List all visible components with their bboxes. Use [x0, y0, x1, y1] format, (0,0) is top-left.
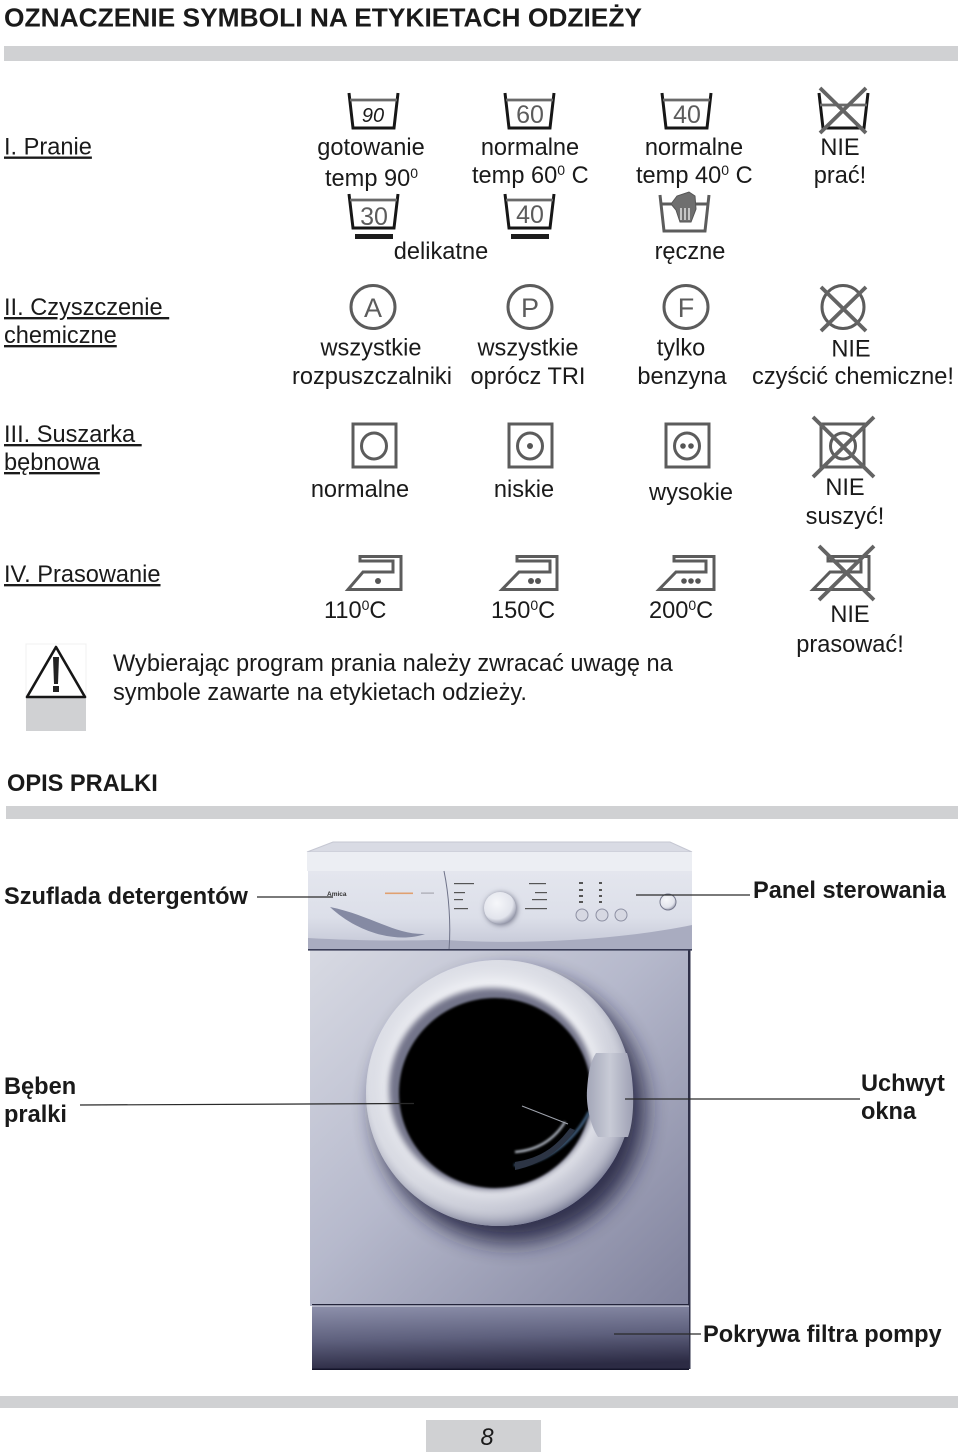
label: boiling: 0 [410, 165, 418, 181]
label: all except TRI: wszystkie [477, 336, 578, 362]
plinth [312, 1304, 689, 1370]
label: all except TRI: oprócz TRI [471, 364, 585, 390]
label: petrol only [637, 336, 727, 390]
label: 200: C [696, 598, 713, 624]
door ring [366, 960, 632, 1226]
section header bar [6, 806, 958, 819]
label: all solvents [292, 336, 452, 390]
label: no dry clean [752, 336, 954, 390]
icon: wash 40: 40 [673, 101, 701, 129]
icon: iron 150 [502, 556, 557, 590]
label: petrol only: tylko [657, 336, 705, 362]
icon: A: A [364, 293, 382, 323]
label: all except TRI [471, 336, 585, 390]
label: normal 40: 0 [721, 162, 729, 178]
label: delicate: delikatne [394, 239, 488, 265]
icon: wash 60 [505, 93, 554, 129]
icon: delicate 40 [505, 194, 554, 239]
label: normal 60 [472, 135, 589, 189]
callout: pump filter cover: Pokrywa filtra pompy [703, 1322, 942, 1348]
label: no ironing: prasować! [796, 632, 904, 658]
icon: F [664, 286, 708, 328]
label: 110: 0 [362, 597, 370, 613]
label: normal 60: 0 [557, 162, 565, 178]
callout: door handle: okna [861, 1099, 917, 1125]
label: low: niskie [494, 477, 554, 503]
label: normal 60: C [565, 163, 589, 189]
icon: iron 110 [348, 556, 401, 590]
heading: dry cleaning: chemiczne [4, 323, 117, 349]
section: dry cleaning [4, 286, 954, 390]
page number: 8 [480, 1425, 494, 1451]
label: boiling: gotowanie [317, 135, 425, 161]
heading: tumble dryer: III. Suszarka [4, 422, 142, 448]
power button [660, 894, 676, 910]
section header bar [4, 46, 958, 61]
heading: tumble dryer [4, 422, 142, 476]
icon: do not wash [819, 88, 868, 133]
buttons [576, 909, 627, 921]
label: no dry clean: NIE [831, 336, 871, 362]
label: 200: 200 [649, 598, 688, 624]
icon: P [508, 286, 552, 328]
icon: F: F [678, 293, 694, 323]
icon: dryer high [666, 424, 709, 467]
label: no dryer: NIE [825, 475, 865, 501]
label: all solvents: wszystkie [320, 336, 421, 362]
callout: control panel: Panel sterowania [753, 878, 947, 904]
label: boiling: temp 90 [325, 166, 410, 192]
door handle [587, 1053, 633, 1137]
label: 110: C [369, 598, 386, 624]
heading: ironing: IV. Prasowanie [4, 562, 161, 588]
label: normal 60: temp 60 [472, 163, 557, 189]
callout: detergent drawer: Szuflada detergentów [4, 884, 248, 910]
section: washing [4, 88, 868, 265]
label: all solvents: rozpuszczalniki [292, 364, 452, 390]
icon: dryer normal [353, 424, 396, 467]
callout: drum [4, 1074, 414, 1128]
note text [113, 651, 674, 706]
label: no ironing: NIE [830, 602, 870, 628]
icon: no ironing [813, 546, 874, 600]
label: boiling [317, 135, 425, 192]
label: 150: C [538, 598, 555, 624]
label: no dryer: suszyć! [806, 504, 884, 530]
callout: door handle: Uchwyt [861, 1071, 945, 1097]
note text: Wybierając program prania należy zwracać uwagę na [113, 651, 674, 677]
label: normal 40 [636, 135, 753, 189]
icon: P: P [521, 293, 539, 323]
callout: door handle [625, 1071, 945, 1125]
door window [389, 988, 595, 1190]
label: normal 40: C [729, 163, 753, 189]
icon: dryer low [509, 424, 552, 467]
icon: wash 40 [662, 93, 711, 129]
icon: wash 60: 60 [516, 101, 544, 129]
cabinet body [310, 948, 690, 1306]
label: petrol only: benzyna [637, 364, 727, 390]
program labels [454, 882, 602, 909]
heading: dry cleaning: II. Czyszczenie [4, 295, 169, 321]
brand: Amica [327, 891, 347, 898]
control panel [307, 842, 692, 951]
label: 150: 0 [530, 597, 538, 613]
icon: no dry clean [821, 286, 866, 331]
heading: I. Pranie: I. Pranie [4, 134, 92, 160]
program knob [485, 893, 517, 925]
icon: delicate 40: 40 [516, 201, 544, 229]
page number [426, 1420, 541, 1452]
heading: washing machine description: OPIS PRALKI [7, 771, 158, 797]
icon: wash 90: 90 [362, 105, 384, 127]
note text: symbole zawarte na etykietach odzieży. [113, 680, 527, 706]
section: tumble dryer [4, 417, 884, 530]
label: 150: 150 [491, 598, 530, 624]
door shadow [375, 973, 645, 1243]
label: normal 40: normalne [645, 135, 743, 161]
label: no dry clean: czyścić chemiczne! [752, 364, 954, 390]
label: 200: 0 [688, 597, 696, 613]
icon: warning triangle [26, 644, 86, 731]
callout: drum: Bęben [4, 1074, 76, 1100]
icon: delicate 30: 30 [360, 203, 388, 231]
icon: delicate 30 [349, 194, 398, 239]
label: 110: 110 [324, 598, 362, 624]
heading: tumble dryer: bębnowa [4, 450, 101, 476]
icon: hand wash [660, 192, 709, 231]
label: normal 40: temp 40 [636, 163, 721, 189]
icon: wash 90 [349, 93, 398, 128]
heading: dry cleaning [4, 295, 169, 349]
label: no ironing [796, 602, 904, 658]
label: no dryer [806, 475, 884, 530]
right edge shadow [688, 950, 690, 1369]
label: do not wash [814, 135, 866, 189]
section: ironing [4, 546, 904, 658]
label: do not wash: NIE [820, 135, 860, 161]
icon: iron 200 [659, 556, 714, 590]
title: OZNACZENIE SYMBOLI NA ETYKIETACH ODZIEŻY [4, 2, 642, 32]
label: high: wysokie [648, 480, 733, 506]
label: hand wash: ręczne [655, 239, 725, 265]
label: do not wash: prać! [814, 163, 866, 189]
label: normal: normalne [311, 477, 409, 503]
icon: A [351, 286, 395, 328]
footer bar [0, 1396, 958, 1408]
illustration: washing machine [307, 842, 692, 1370]
icon: no dryer [813, 417, 874, 477]
callout: drum: pralki [4, 1102, 67, 1128]
label: normal 60: normalne [481, 135, 579, 161]
